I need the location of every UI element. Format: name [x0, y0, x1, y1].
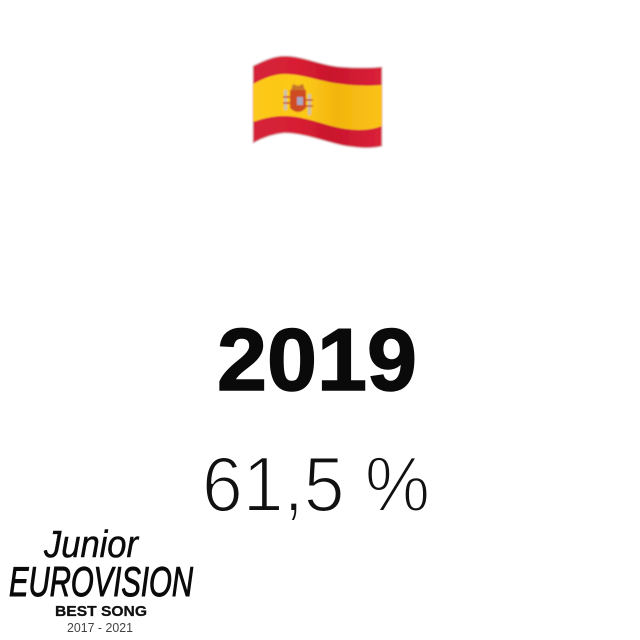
logo: Junior Eurovision Best Song — [9, 524, 193, 635]
arms right pillar — [308, 94, 311, 115]
percentage score: 61,5 % — [202, 440, 430, 528]
flag coat of arms — [283, 84, 313, 115]
arms ribbons — [283, 97, 313, 106]
arms shield — [290, 90, 306, 112]
arms left pillar — [284, 90, 287, 110]
icon: Spanish flag — [253, 56, 382, 148]
arms crown — [291, 84, 305, 90]
logo years: 2017 - 2021 — [67, 621, 133, 635]
flag red field — [253, 56, 382, 148]
arms quarter — [297, 97, 303, 105]
flag yellow band — [253, 74, 382, 130]
year heading: 2019 — [217, 310, 417, 409]
logo word Eurovision: EUROVISION — [9, 558, 193, 605]
logo word Junior: Junior — [43, 524, 139, 566]
logo subtitle: BEST SONG — [55, 603, 147, 620]
